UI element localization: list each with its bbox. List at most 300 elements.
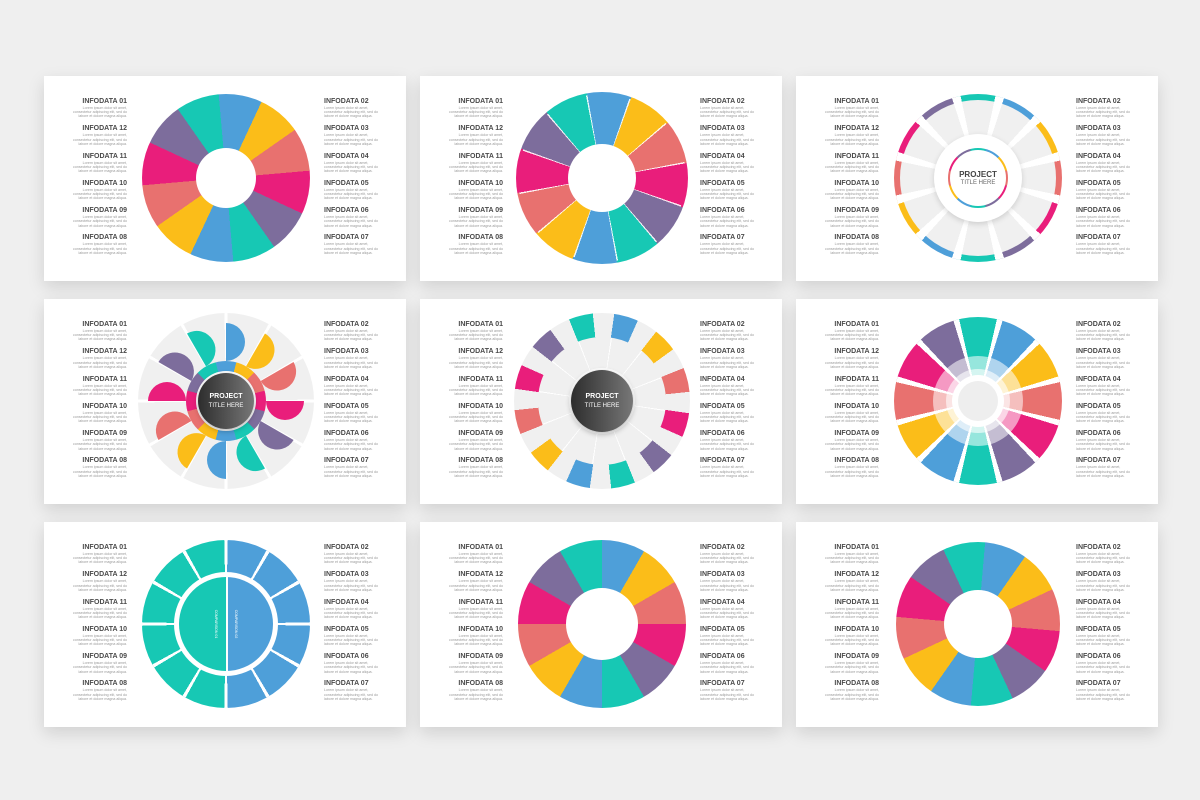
left labels: consectetur adipiscing elit, sed do — [449, 360, 503, 364]
chart: ring with project title: PROJECT — [959, 170, 997, 179]
left labels: consectetur adipiscing elit, sed do — [73, 665, 127, 669]
right labels: consectetur adipiscing elit, sed do — [324, 611, 378, 615]
left labels: Lorem ipsum dolor sit amet, — [459, 634, 503, 638]
left labels — [73, 98, 127, 255]
right labels: consectetur adipiscing elit, sed do — [324, 388, 378, 392]
right labels — [700, 544, 754, 701]
left labels — [73, 544, 127, 701]
right labels: consectetur adipiscing elit, sed do — [1076, 247, 1130, 251]
left labels: labore et dolore magna aliqua. — [78, 697, 127, 701]
right labels: INFODATA 06 — [1076, 430, 1121, 437]
right labels: INFODATA 07 — [700, 680, 745, 687]
left labels: labore et dolore magna aliqua. — [454, 251, 503, 255]
right labels — [1076, 98, 1130, 255]
left labels: labore et dolore magna aliqua. — [78, 474, 127, 478]
right labels: INFODATA 04 — [324, 376, 369, 383]
right labels: INFODATA 04 — [324, 153, 369, 160]
left labels: consectetur adipiscing elit, sed do — [825, 638, 879, 642]
left labels: Lorem ipsum dolor sit amet, — [83, 242, 127, 246]
slide 6: wedge wheel — [796, 299, 1158, 504]
left labels: Lorem ipsum dolor sit amet, — [83, 329, 127, 333]
right labels: INFODATA 04 — [700, 599, 745, 606]
chart: triangles wheel: TITLE HERE — [585, 403, 619, 409]
left labels: consectetur adipiscing elit, sed do — [825, 556, 879, 560]
right labels: labore et dolore magna aliqua. — [1076, 615, 1125, 619]
left labels: consectetur adipiscing elit, sed do — [825, 388, 879, 392]
left labels: Lorem ipsum dolor sit amet, — [83, 356, 127, 360]
left labels: Lorem ipsum dolor sit amet, — [835, 552, 879, 556]
left labels: consectetur adipiscing elit, sed do — [73, 693, 127, 697]
left labels: labore et dolore magna aliqua. — [78, 251, 127, 255]
right labels — [1076, 544, 1130, 701]
right labels: Lorem ipsum dolor sit amet, — [700, 215, 744, 219]
right labels: labore et dolore magna aliqua. — [700, 447, 749, 451]
right labels: labore et dolore magna aliqua. — [324, 419, 373, 423]
right labels: consectetur adipiscing elit, sed do — [700, 556, 754, 560]
left labels: INFODATA 01 — [458, 98, 503, 105]
right labels: labore et dolore magna aliqua. — [324, 392, 373, 396]
left labels: INFODATA 12 — [834, 348, 879, 355]
right labels: labore et dolore magna aliqua. — [700, 697, 749, 701]
slide 2: petal ring — [420, 76, 782, 281]
left labels: INFODATA 01 — [82, 98, 127, 105]
chart: semicircles: PROJECT — [209, 393, 243, 400]
left labels: consectetur adipiscing elit, sed do — [825, 470, 879, 474]
left labels: consectetur adipiscing elit, sed do — [449, 638, 503, 642]
right labels: consectetur adipiscing elit, sed do — [1076, 665, 1130, 669]
right labels: INFODATA 03 — [700, 571, 745, 578]
left labels: INFODATA 01 — [834, 544, 879, 551]
left labels: INFODATA 10 — [458, 180, 503, 187]
right labels: Lorem ipsum dolor sit amet, — [324, 438, 368, 442]
right labels: Lorem ipsum dolor sit amet, — [1076, 688, 1120, 692]
right labels: Lorem ipsum dolor sit amet, — [1076, 552, 1120, 556]
left labels: INFODATA 12 — [458, 348, 503, 355]
slide 4: semicircle petals — [44, 299, 406, 504]
right labels: Lorem ipsum dolor sit amet, — [324, 215, 368, 219]
left labels: labore et dolore magna aliqua. — [78, 615, 127, 619]
left labels: Lorem ipsum dolor sit amet, — [835, 661, 879, 665]
chart: comparison: COMPARISON 01 — [214, 610, 218, 638]
right labels: INFODATA 04 — [700, 153, 745, 160]
right labels: labore et dolore magna aliqua. — [700, 365, 749, 369]
left labels: Lorem ipsum dolor sit amet, — [459, 106, 503, 110]
right labels: consectetur adipiscing elit, sed do — [324, 192, 378, 196]
left labels: Lorem ipsum dolor sit amet, — [83, 133, 127, 137]
right labels: Lorem ipsum dolor sit amet, — [700, 356, 744, 360]
left labels: consectetur adipiscing elit, sed do — [825, 665, 879, 669]
left labels: INFODATA 01 — [458, 544, 503, 551]
right labels: labore et dolore magna aliqua. — [324, 169, 373, 173]
left labels: labore et dolore magna aliqua. — [830, 588, 879, 592]
left labels: consectetur adipiscing elit, sed do — [449, 247, 503, 251]
left labels: INFODATA 09 — [82, 653, 127, 660]
right labels: labore et dolore magna aliqua. — [700, 114, 749, 118]
left labels: Lorem ipsum dolor sit amet, — [835, 438, 879, 442]
right labels: consectetur adipiscing elit, sed do — [1076, 415, 1130, 419]
right labels: INFODATA 02 — [324, 98, 369, 105]
left labels: Lorem ipsum dolor sit amet, — [835, 188, 879, 192]
left labels: consectetur adipiscing elit, sed do — [73, 415, 127, 419]
right labels: consectetur adipiscing elit, sed do — [700, 638, 754, 642]
right labels: INFODATA 03 — [324, 571, 369, 578]
right labels: labore et dolore magna aliqua. — [1076, 697, 1125, 701]
left labels: labore et dolore magna aliqua. — [830, 114, 879, 118]
left labels: Lorem ipsum dolor sit amet, — [459, 607, 503, 611]
right labels: INFODATA 06 — [700, 430, 745, 437]
left labels: INFODATA 11 — [83, 599, 127, 606]
right labels: INFODATA 04 — [1076, 153, 1121, 160]
left labels: consectetur adipiscing elit, sed do — [825, 247, 879, 251]
left labels — [825, 321, 879, 478]
left labels: INFODATA 11 — [83, 153, 127, 160]
right labels: consectetur adipiscing elit, sed do — [1076, 442, 1130, 446]
right labels: labore et dolore magna aliqua. — [1076, 196, 1125, 200]
left labels: labore et dolore magna aliqua. — [78, 560, 127, 564]
left labels: Lorem ipsum dolor sit amet, — [459, 579, 503, 583]
right labels: Lorem ipsum dolor sit amet, — [700, 133, 744, 137]
right labels: INFODATA 02 — [700, 321, 745, 328]
left labels: Lorem ipsum dolor sit amet, — [459, 384, 503, 388]
left labels: consectetur adipiscing elit, sed do — [73, 110, 127, 114]
left labels: Lorem ipsum dolor sit amet, — [83, 188, 127, 192]
right labels: Lorem ipsum dolor sit amet, — [700, 438, 744, 442]
right labels — [324, 321, 378, 478]
chart: puzzle donut — [518, 540, 686, 708]
right labels: INFODATA 03 — [1076, 125, 1121, 132]
right labels: labore et dolore magna aliqua. — [1076, 337, 1125, 341]
left labels: labore et dolore magna aliqua. — [78, 196, 127, 200]
left labels — [73, 321, 127, 478]
right labels: Lorem ipsum dolor sit amet, — [1076, 106, 1120, 110]
left labels: consectetur adipiscing elit, sed do — [825, 442, 879, 446]
right labels: INFODATA 05 — [324, 626, 369, 633]
left labels: INFODATA 11 — [835, 599, 879, 606]
right labels: labore et dolore magna aliqua. — [700, 474, 749, 478]
right labels: INFODATA 02 — [1076, 98, 1121, 105]
left labels: Lorem ipsum dolor sit amet, — [83, 106, 127, 110]
right labels: Lorem ipsum dolor sit amet, — [1076, 579, 1120, 583]
right labels: INFODATA 06 — [1076, 653, 1121, 660]
right labels: labore et dolore magna aliqua. — [324, 447, 373, 451]
left labels: consectetur adipiscing elit, sed do — [825, 415, 879, 419]
right labels: Lorem ipsum dolor sit amet, — [700, 329, 744, 333]
right labels: labore et dolore magna aliqua. — [1076, 447, 1125, 451]
left labels: consectetur adipiscing elit, sed do — [449, 442, 503, 446]
right labels: labore et dolore magna aliqua. — [324, 560, 373, 564]
left labels: labore et dolore magna aliqua. — [830, 697, 879, 701]
left labels: INFODATA 10 — [82, 180, 127, 187]
right labels: labore et dolore magna aliqua. — [700, 142, 749, 146]
chart: petal ring — [516, 92, 688, 264]
right labels: labore et dolore magna aliqua. — [700, 392, 749, 396]
left labels: Lorem ipsum dolor sit amet, — [459, 215, 503, 219]
left labels: labore et dolore magna aliqua. — [830, 224, 879, 228]
right labels: consectetur adipiscing elit, sed do — [1076, 360, 1130, 364]
right labels: consectetur adipiscing elit, sed do — [324, 693, 378, 697]
right labels: Lorem ipsum dolor sit amet, — [324, 634, 368, 638]
left labels: labore et dolore magna aliqua. — [830, 474, 879, 478]
left labels: consectetur adipiscing elit, sed do — [73, 247, 127, 251]
left labels: labore et dolore magna aliqua. — [454, 114, 503, 118]
left labels: Lorem ipsum dolor sit amet, — [835, 329, 879, 333]
slide 9: arrow donut — [796, 522, 1158, 727]
left labels: Lorem ipsum dolor sit amet, — [83, 661, 127, 665]
left labels: Lorem ipsum dolor sit amet, — [459, 438, 503, 442]
right labels: labore et dolore magna aliqua. — [1076, 224, 1125, 228]
left labels: consectetur adipiscing elit, sed do — [449, 584, 503, 588]
left labels: INFODATA 08 — [82, 457, 127, 464]
right labels: consectetur adipiscing elit, sed do — [324, 138, 378, 142]
right labels: consectetur adipiscing elit, sed do — [324, 219, 378, 223]
left labels: INFODATA 11 — [459, 153, 503, 160]
right labels: Lorem ipsum dolor sit amet, — [1076, 329, 1120, 333]
left labels: INFODATA 12 — [458, 125, 503, 132]
right labels: INFODATA 02 — [1076, 544, 1121, 551]
left labels: Lorem ipsum dolor sit amet, — [835, 161, 879, 165]
left labels: labore et dolore magna aliqua. — [454, 196, 503, 200]
right labels: consectetur adipiscing elit, sed do — [324, 470, 378, 474]
left labels: consectetur adipiscing elit, sed do — [449, 556, 503, 560]
left labels: Lorem ipsum dolor sit amet, — [459, 242, 503, 246]
right labels: INFODATA 06 — [700, 653, 745, 660]
right labels: Lorem ipsum dolor sit amet, — [1076, 384, 1120, 388]
right labels: labore et dolore magna aliqua. — [1076, 474, 1125, 478]
left labels: labore et dolore magna aliqua. — [454, 447, 503, 451]
right labels: consectetur adipiscing elit, sed do — [324, 110, 378, 114]
right labels: INFODATA 02 — [324, 544, 369, 551]
left labels: Lorem ipsum dolor sit amet, — [835, 411, 879, 415]
left labels: labore et dolore magna aliqua. — [78, 447, 127, 451]
chart: ring with project title — [894, 94, 1062, 262]
left labels: INFODATA 12 — [82, 348, 127, 355]
right labels: INFODATA 05 — [700, 626, 745, 633]
right labels: INFODATA 05 — [1076, 180, 1121, 187]
left labels: labore et dolore magna aliqua. — [454, 642, 503, 646]
right labels: labore et dolore magna aliqua. — [324, 615, 373, 619]
left labels: consectetur adipiscing elit, sed do — [73, 442, 127, 446]
left labels: INFODATA 12 — [458, 571, 503, 578]
right labels: consectetur adipiscing elit, sed do — [324, 333, 378, 337]
left labels: consectetur adipiscing elit, sed do — [825, 219, 879, 223]
right labels: consectetur adipiscing elit, sed do — [1076, 110, 1130, 114]
left labels: INFODATA 08 — [458, 457, 503, 464]
right labels: INFODATA 04 — [324, 599, 369, 606]
left labels: Lorem ipsum dolor sit amet, — [835, 133, 879, 137]
right labels: labore et dolore magna aliqua. — [324, 196, 373, 200]
chart: semicircles: TITLE HERE — [209, 403, 243, 409]
left labels: INFODATA 11 — [459, 599, 503, 606]
right labels: labore et dolore magna aliqua. — [1076, 670, 1125, 674]
right labels: Lorem ipsum dolor sit amet, — [700, 552, 744, 556]
right labels: Lorem ipsum dolor sit amet, — [324, 579, 368, 583]
right labels — [1076, 321, 1130, 478]
right labels: INFODATA 06 — [700, 207, 745, 214]
left labels: INFODATA 01 — [834, 98, 879, 105]
right labels: consectetur adipiscing elit, sed do — [1076, 556, 1130, 560]
right labels: consectetur adipiscing elit, sed do — [700, 219, 754, 223]
slide 8: puzzle donut — [420, 522, 782, 727]
right labels: Lorem ipsum dolor sit amet, — [324, 688, 368, 692]
left labels: INFODATA 11 — [83, 376, 127, 383]
right labels: consectetur adipiscing elit, sed do — [700, 333, 754, 337]
left labels: labore et dolore magna aliqua. — [454, 588, 503, 592]
left labels: Lorem ipsum dolor sit amet, — [83, 688, 127, 692]
right labels: INFODATA 07 — [700, 234, 745, 241]
chart: swirl donut — [142, 94, 310, 262]
right labels: consectetur adipiscing elit, sed do — [324, 247, 378, 251]
right labels: consectetur adipiscing elit, sed do — [700, 415, 754, 419]
left labels: labore et dolore magna aliqua. — [830, 337, 879, 341]
left labels: consectetur adipiscing elit, sed do — [73, 192, 127, 196]
left labels: INFODATA 10 — [458, 626, 503, 633]
right labels: INFODATA 06 — [324, 653, 369, 660]
left labels: INFODATA 08 — [82, 680, 127, 687]
left labels: consectetur adipiscing elit, sed do — [73, 360, 127, 364]
left labels: consectetur adipiscing elit, sed do — [449, 665, 503, 669]
left labels: Lorem ipsum dolor sit amet, — [83, 465, 127, 469]
left labels: Lorem ipsum dolor sit amet, — [459, 688, 503, 692]
right labels: consectetur adipiscing elit, sed do — [1076, 333, 1130, 337]
right labels: Lorem ipsum dolor sit amet, — [1076, 215, 1120, 219]
left labels: labore et dolore magna aliqua. — [454, 392, 503, 396]
left labels — [449, 321, 503, 478]
right labels: INFODATA 05 — [1076, 403, 1121, 410]
left labels: labore et dolore magna aliqua. — [830, 142, 879, 146]
right labels: consectetur adipiscing elit, sed do — [1076, 388, 1130, 392]
right labels: INFODATA 02 — [324, 321, 369, 328]
right labels: consectetur adipiscing elit, sed do — [324, 665, 378, 669]
right labels: labore et dolore magna aliqua. — [700, 337, 749, 341]
left labels: Lorem ipsum dolor sit amet, — [835, 215, 879, 219]
right labels: labore et dolore magna aliqua. — [324, 224, 373, 228]
right labels: INFODATA 03 — [324, 125, 369, 132]
left labels: INFODATA 10 — [82, 626, 127, 633]
right labels: consectetur adipiscing elit, sed do — [324, 360, 378, 364]
right labels: INFODATA 07 — [324, 234, 369, 241]
left labels: INFODATA 01 — [458, 321, 503, 328]
left labels: consectetur adipiscing elit, sed do — [825, 611, 879, 615]
left labels: Lorem ipsum dolor sit amet, — [835, 579, 879, 583]
right labels: INFODATA 07 — [324, 457, 369, 464]
right labels: labore et dolore magna aliqua. — [700, 169, 749, 173]
left labels: Lorem ipsum dolor sit amet, — [835, 384, 879, 388]
left labels: INFODATA 08 — [458, 234, 503, 241]
right labels: consectetur adipiscing elit, sed do — [700, 360, 754, 364]
left labels: labore et dolore magna aliqua. — [78, 337, 127, 341]
right labels: consectetur adipiscing elit, sed do — [1076, 638, 1130, 642]
right labels: INFODATA 06 — [1076, 207, 1121, 214]
left labels: consectetur adipiscing elit, sed do — [73, 165, 127, 169]
right labels: consectetur adipiscing elit, sed do — [1076, 584, 1130, 588]
right labels: labore et dolore magna aliqua. — [1076, 169, 1125, 173]
left labels: labore et dolore magna aliqua. — [78, 365, 127, 369]
right labels: INFODATA 03 — [1076, 348, 1121, 355]
left labels: labore et dolore magna aliqua. — [454, 337, 503, 341]
slide 7: comparison wheel — [44, 522, 406, 727]
left labels: labore et dolore magna aliqua. — [78, 169, 127, 173]
right labels: consectetur adipiscing elit, sed do — [700, 192, 754, 196]
left labels: labore et dolore magna aliqua. — [830, 670, 879, 674]
left labels: INFODATA 09 — [834, 207, 879, 214]
left labels — [449, 98, 503, 255]
left labels: INFODATA 11 — [835, 376, 879, 383]
left labels: Lorem ipsum dolor sit amet, — [83, 215, 127, 219]
right labels: labore et dolore magna aliqua. — [324, 142, 373, 146]
right labels: INFODATA 04 — [700, 376, 745, 383]
left labels: INFODATA 01 — [82, 544, 127, 551]
left labels: Lorem ipsum dolor sit amet, — [835, 356, 879, 360]
right labels: labore et dolore magna aliqua. — [324, 642, 373, 646]
slide 5: triangles wheel — [420, 299, 782, 504]
right labels: Lorem ipsum dolor sit amet, — [1076, 661, 1120, 665]
right labels: Lorem ipsum dolor sit amet, — [700, 411, 744, 415]
left labels: consectetur adipiscing elit, sed do — [449, 470, 503, 474]
right labels: INFODATA 06 — [324, 207, 369, 214]
chart: semicircles — [138, 313, 314, 489]
left labels: labore et dolore magna aliqua. — [78, 642, 127, 646]
right labels: labore et dolore magna aliqua. — [700, 560, 749, 564]
chart: comparison — [142, 540, 310, 708]
right labels: consectetur adipiscing elit, sed do — [700, 247, 754, 251]
left labels: Lorem ipsum dolor sit amet, — [83, 552, 127, 556]
right labels: consectetur adipiscing elit, sed do — [700, 442, 754, 446]
left labels: Lorem ipsum dolor sit amet, — [83, 384, 127, 388]
left labels: Lorem ipsum dolor sit amet, — [459, 411, 503, 415]
right labels: Lorem ipsum dolor sit amet, — [324, 465, 368, 469]
right labels: consectetur adipiscing elit, sed do — [1076, 470, 1130, 474]
left labels: Lorem ipsum dolor sit amet, — [835, 634, 879, 638]
right labels: Lorem ipsum dolor sit amet, — [324, 329, 368, 333]
right labels: labore et dolore magna aliqua. — [1076, 642, 1125, 646]
right labels — [700, 98, 754, 255]
left labels: labore et dolore magna aliqua. — [454, 169, 503, 173]
left labels: consectetur adipiscing elit, sed do — [73, 638, 127, 642]
left labels: labore et dolore magna aliqua. — [454, 419, 503, 423]
left labels: INFODATA 08 — [834, 234, 879, 241]
right labels: INFODATA 07 — [700, 457, 745, 464]
right labels: consectetur adipiscing elit, sed do — [1076, 693, 1130, 697]
right labels: Lorem ipsum dolor sit amet, — [324, 133, 368, 137]
right labels: labore et dolore magna aliqua. — [1076, 114, 1125, 118]
right labels: Lorem ipsum dolor sit amet, — [1076, 356, 1120, 360]
right labels: Lorem ipsum dolor sit amet, — [324, 384, 368, 388]
right labels: INFODATA 06 — [324, 430, 369, 437]
right labels: consectetur adipiscing elit, sed do — [700, 165, 754, 169]
chart: triangles wheel: PROJECT — [585, 393, 619, 400]
right labels: Lorem ipsum dolor sit amet, — [700, 161, 744, 165]
right labels: consectetur adipiscing elit, sed do — [700, 611, 754, 615]
left labels: INFODATA 10 — [82, 403, 127, 410]
right labels: consectetur adipiscing elit, sed do — [324, 415, 378, 419]
left labels: consectetur adipiscing elit, sed do — [449, 165, 503, 169]
left labels: labore et dolore magna aliqua. — [454, 697, 503, 701]
left labels: consectetur adipiscing elit, sed do — [825, 138, 879, 142]
left labels: consectetur adipiscing elit, sed do — [73, 138, 127, 142]
left labels: INFODATA 12 — [82, 125, 127, 132]
right labels: INFODATA 05 — [324, 403, 369, 410]
right labels: labore et dolore magna aliqua. — [700, 196, 749, 200]
left labels: consectetur adipiscing elit, sed do — [825, 192, 879, 196]
right labels: Lorem ipsum dolor sit amet, — [324, 411, 368, 415]
right labels: labore et dolore magna aliqua. — [700, 615, 749, 619]
left labels — [825, 544, 879, 701]
right labels: consectetur adipiscing elit, sed do — [700, 584, 754, 588]
left labels: Lorem ipsum dolor sit amet, — [83, 161, 127, 165]
left labels: consectetur adipiscing elit, sed do — [73, 333, 127, 337]
left labels: INFODATA 11 — [835, 153, 879, 160]
right labels: labore et dolore magna aliqua. — [324, 670, 373, 674]
